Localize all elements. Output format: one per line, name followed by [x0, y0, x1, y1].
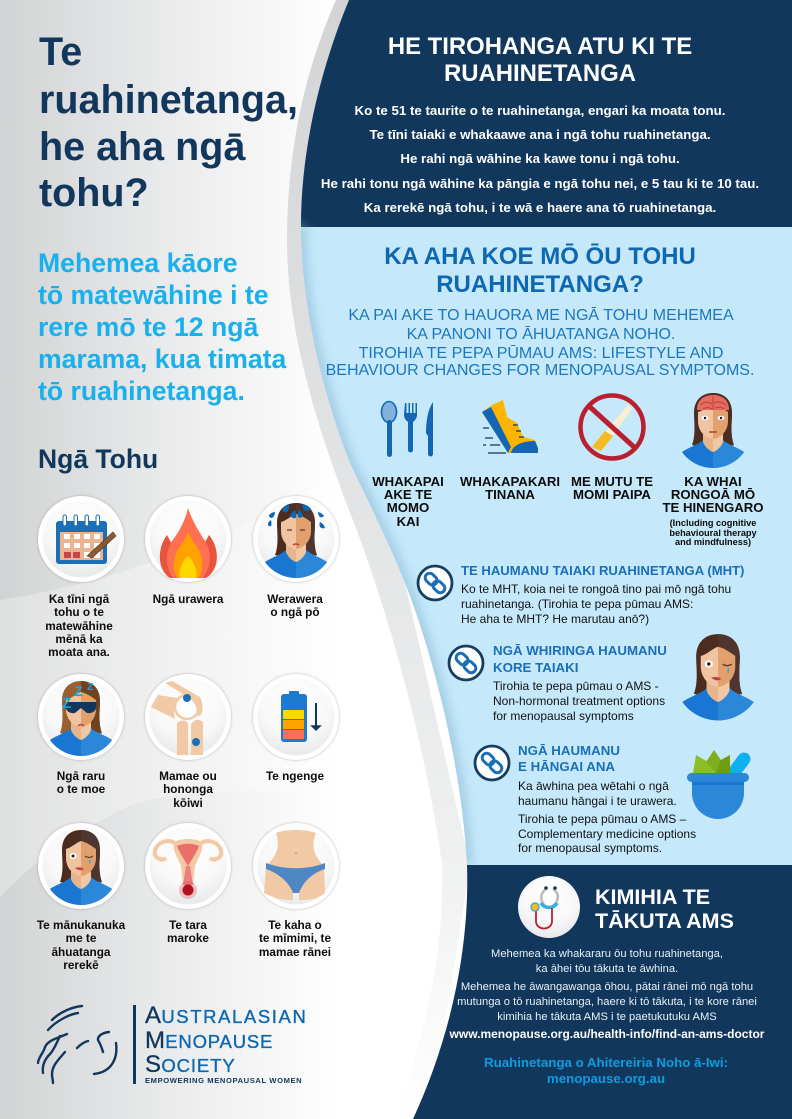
- doctor heading: [595, 885, 734, 933]
- panel: find an AMS doctor: [413, 865, 792, 1119]
- action labels: behavioural therapy: [669, 528, 758, 538]
- doctor text: Mehemea ka whakararu ōu tohu ruahinetanga,: [491, 948, 723, 960]
- footer link: [484, 1055, 728, 1086]
- icon: link: [475, 746, 509, 780]
- icon: calendar: [38, 496, 124, 582]
- symptom: anxiety and mood changes: me te: [66, 931, 97, 945]
- icon: running shoe: [482, 400, 538, 453]
- symptom: night sweats: o ngā pō: [270, 605, 320, 619]
- section: non-hormonal options: Tirohia te pepa pūmau o AMS -: [493, 679, 659, 693]
- symptom: irregular periods: matewāhine: [45, 619, 113, 633]
- icon: no smoking: [580, 396, 644, 458]
- section: complementary therapies: Tirohia te pepa pūmau o AMS –: [518, 812, 687, 826]
- icon: flame: [145, 496, 231, 582]
- symptom: vaginal dryness: maroke: [167, 931, 209, 945]
- doctor text: Mehemea he āwangawanga ōhou, pātai rānei mō ngā tohu: [461, 981, 753, 993]
- symptom: urinary problems: [253, 823, 339, 959]
- section: complementary therapies: NGĀ HAUMANU: [518, 743, 620, 758]
- title: tohu?: [39, 171, 149, 215]
- subtitle: Mehemea kāore: [38, 248, 238, 278]
- symptom: fatigue: [253, 674, 339, 783]
- panel: overview header: [280, 0, 792, 227]
- section: complementary therapies: for menopausal symptoms.: [518, 841, 662, 855]
- symptom: irregular periods: Ka tīni ngā: [49, 592, 110, 606]
- title: [39, 30, 298, 215]
- overview heading: HE TIROHANGA ATU KI TE: [388, 33, 692, 60]
- title: ruahinetanga,: [39, 78, 298, 122]
- section: MHT: ruahinetanga. (Tirohia te pepa pūmau AMS:: [461, 597, 693, 611]
- subtitle: [38, 248, 287, 406]
- logo wordmark: [145, 1002, 307, 1085]
- action labels: MOMO: [387, 500, 429, 515]
- icon: crying woman: [38, 823, 124, 909]
- section: non-hormonal options: for menopausal symptoms: [493, 709, 634, 723]
- overview heading: RUAHINETANGA: [444, 60, 636, 87]
- panel intro text: KA PAI AKE TO HAUORA ME NGĀ TOHU MEHEMEA: [348, 306, 734, 324]
- section: non-hormonal options: NGĀ WHIRINGA HAUMANU: [493, 643, 667, 658]
- action labels: and mindfulness): [675, 537, 751, 547]
- action labels: ME MUTU TE: [571, 474, 653, 489]
- symptom: irregular periods: moata ana.: [48, 645, 110, 659]
- footer link: menopause.org.au: [547, 1071, 665, 1086]
- doctor text: [449, 948, 765, 1041]
- symptom: joint pain: kōiwi: [173, 796, 203, 810]
- symptom: vaginal dryness: [145, 823, 231, 945]
- icon: sleeping woman: Z: [87, 681, 94, 693]
- subtitle: tō matewāhine i te: [38, 280, 269, 310]
- panel intro text: TIROHIA TE PEPA PŪMAU AMS: LIFESTYLE AND: [359, 344, 723, 362]
- symptom: sleep problems: [38, 674, 124, 796]
- section: complementary therapies: haumanu hāngai i te urawera.: [518, 794, 677, 808]
- symptom: irregular periods: mēnā ka: [55, 632, 103, 646]
- doctor heading: KIMIHIA TE: [595, 885, 710, 909]
- panel intro text: KA PANONI TO ĀHUATANGA NOHO.: [407, 325, 675, 343]
- overview text: Ko te 51 te taurite o te ruahinetanga, engari ka moata tonu.: [355, 103, 725, 118]
- symptom: sleep problems: Ngā raru: [57, 769, 105, 783]
- doctor heading: TĀKUTA AMS: [595, 909, 734, 933]
- subtitle: tō ruahinetanga.: [38, 376, 245, 406]
- doctor text: ka āhei tōu tākuta te āwhina.: [536, 963, 678, 975]
- icon: cutlery: [382, 402, 433, 457]
- symptom: urinary problems: Te kaha o: [268, 918, 322, 932]
- symptom: joint pain: Mamae ou: [159, 769, 217, 783]
- icon: link: [418, 566, 452, 600]
- icon: sweating woman: [253, 496, 339, 582]
- section: non-hormonal options: [449, 643, 667, 723]
- symptoms heading: Ngā Tohu: [38, 444, 158, 474]
- icon: sleeping woman: [38, 674, 124, 760]
- logo wordmark: EMPOWERING MENOPAUSAL WOMEN: [145, 1076, 302, 1085]
- section: MHT: He aha te MHT? He marutau anō?): [461, 612, 649, 626]
- action labels: AKE TE: [384, 487, 432, 502]
- footer link: Ruahinetanga o Ahitereiria Noho ā-Iwi:: [484, 1055, 728, 1070]
- panel heading: RUAHINETANGA?: [436, 271, 644, 298]
- symptom: joint pain: [145, 674, 231, 810]
- symptom: anxiety and mood changes: rerekē: [63, 958, 99, 972]
- panel intro text: [326, 306, 754, 379]
- symptom: irregular periods: tohu o te: [54, 605, 104, 619]
- logo wordmark: SOCIETY: [145, 1051, 236, 1078]
- symptom: urinary problems: te mīmimi, te: [259, 931, 331, 945]
- icon: stethoscope: [518, 876, 580, 938]
- doctor text: mutunga o tō ruahinetanga, haere ki tō tākuta, i te kore rānei: [457, 996, 757, 1008]
- overview text: Te tīni taiaki e whakaawe ana i ngā tohu ruahinetanga.: [369, 127, 711, 142]
- logo mark: [38, 1006, 116, 1083]
- overview text: He rahi ngā wāhine ka kawe tonu i ngā tohu.: [400, 151, 680, 166]
- action labels: KAI: [397, 514, 419, 529]
- symptom: night sweats: Werawera: [267, 592, 323, 606]
- overview heading: [389, 37, 692, 81]
- icon: belly: [253, 823, 339, 909]
- overview text: Ka rerekē ngā tohu, i te wā e haere ana tō ruahinetanga.: [364, 200, 716, 215]
- symptom: urinary problems: mamae rānei: [259, 945, 331, 959]
- section: non-hormonal options: Non-hormonal treatment options: [493, 694, 665, 708]
- icon: uterus: [145, 823, 231, 909]
- icon: anxious woman: [682, 634, 754, 720]
- icon: woman with brain: [682, 393, 744, 468]
- action labels: TINANA: [485, 487, 535, 502]
- icon: sleeping woman: Z: [74, 683, 83, 699]
- section: MHT: TE HAUMANU TAIAKI RUAHINETANGA (MHT): [461, 563, 744, 578]
- symptom: fatigue: Te ngenge: [266, 769, 324, 783]
- icon: link: [449, 646, 483, 680]
- action labels: (Including cognitive: [670, 518, 756, 528]
- panel heading: KA AHA KOE MŌ ŌU TOHU: [384, 243, 696, 270]
- symptom: joint pain: hononga: [163, 782, 213, 796]
- logo wordmark: MENOPAUSE: [145, 1027, 273, 1054]
- section: non-hormonal options: KORE TAIAKI: [493, 660, 578, 675]
- icon: herb bowl: [687, 750, 749, 819]
- action labels: KA WHAI: [684, 474, 742, 489]
- symptom: hot flushes: [145, 496, 231, 606]
- icon: knee: [145, 674, 231, 760]
- action labels: TE HINENGARO: [662, 500, 764, 515]
- icon: sleeping woman: Z: [62, 695, 71, 712]
- symptom: irregular periods: [38, 496, 124, 659]
- icon: battery: [253, 674, 339, 760]
- action labels: [372, 474, 764, 547]
- action labels: MOMI PAIPA: [573, 487, 651, 502]
- section: MHT: Ko te MHT, koia nei te rongoā tino pai mō ngā tohu: [461, 582, 731, 596]
- subtitle: marama, kua timata: [38, 344, 287, 374]
- symptom: vaginal dryness: Te tara: [169, 918, 207, 932]
- symptom: night sweats: [253, 496, 339, 619]
- symptom: sleep problems: o te moe: [57, 782, 106, 796]
- overview text: He rahi tonu ngā wāhine ka pāngia e ngā tohu nei, e 5 tau ki te 10 tau.: [321, 176, 759, 191]
- overview text: [321, 103, 759, 215]
- symptom: hot flushes: Ngā urawera: [153, 592, 224, 606]
- panel: what can you do: [280, 225, 792, 865]
- section: complementary therapies: Ka āwhina pea wētahi o ngā: [518, 779, 669, 793]
- action labels: RONGOĀ MŌ: [671, 487, 755, 502]
- symptom: anxiety and mood changes: āhuatanga: [52, 945, 111, 959]
- section: complementary therapies: [475, 743, 696, 855]
- section: MHT: [418, 563, 744, 626]
- subtitle: rere mō te 12 ngā: [38, 312, 258, 342]
- symptom: anxiety and mood changes: [37, 823, 126, 972]
- doctor text: kimihia he tākuta AMS i te paetukutuku AMS: [497, 1011, 717, 1023]
- action labels: WHAKAPAKARI: [460, 474, 560, 489]
- logo wordmark: AUSTRALASIAN: [145, 1002, 307, 1029]
- section: complementary therapies: E HĀNGAI ANA: [518, 759, 615, 774]
- doctor text: www.menopause.org.au/health-info/find-an-ams-doctor: [449, 1027, 765, 1041]
- title: he aha ngā: [39, 125, 246, 169]
- action labels: WHAKAPAI: [372, 474, 444, 489]
- panel heading: [384, 243, 696, 298]
- section: complementary therapies: Complementary medicine options: [518, 827, 696, 841]
- title: Te: [39, 30, 82, 74]
- panel intro text: BEHAVIOUR CHANGES FOR MENOPAUSAL SYMPTOMS.: [326, 362, 754, 379]
- curved grey band: [287, 0, 470, 1119]
- logo: Australasian Menopause Society: [38, 1002, 307, 1085]
- symptom: anxiety and mood changes: Te mānukanuka: [37, 918, 126, 932]
